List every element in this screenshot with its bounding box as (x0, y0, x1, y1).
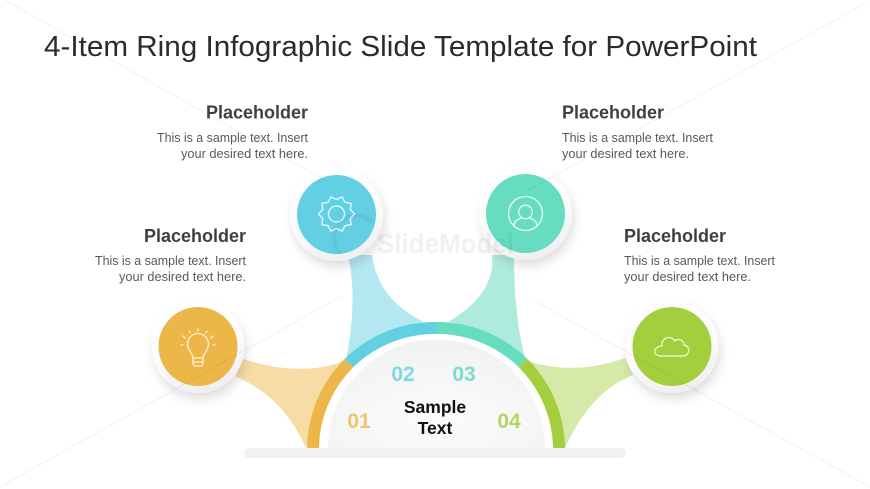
ring segment 02 (349, 328, 436, 363)
number 03: 03 (452, 363, 476, 386)
center label: Sample (404, 397, 466, 417)
center label: Text (418, 418, 453, 438)
number 01: 01 (347, 410, 371, 433)
title: 4-Item Ring Infographic Slide Template for PowerPoint (44, 31, 757, 63)
text block: left: This is a sample text. Insert (95, 254, 247, 268)
node 2: gear (290, 168, 383, 261)
text block: left: your desired text here. (119, 270, 246, 284)
center semicircle (328, 340, 545, 448)
text block: top left: This is a sample text. Insert (157, 131, 309, 145)
text block: top right (562, 102, 714, 161)
funnel: item 4 (527, 358, 633, 448)
text block: top left (157, 102, 309, 161)
icon: cloud (655, 338, 689, 356)
ring segment 01 (313, 363, 349, 448)
icon: user (508, 196, 542, 230)
icon: gear (318, 197, 354, 231)
icon: lightbulb (181, 329, 215, 366)
text block: top right: Placeholder (562, 102, 664, 122)
text block: top right: your desired text here. (562, 147, 689, 161)
funnel: item 1 (236, 358, 344, 448)
base bar (244, 448, 626, 458)
watermark: SlideModel (377, 228, 514, 259)
ring segment 04 (523, 363, 559, 448)
number 04: 04 (497, 410, 521, 433)
text block: right (624, 226, 776, 284)
node 4: cloud (626, 300, 718, 393)
watermark (334, 216, 536, 259)
text block: top left: Placeholder (206, 102, 308, 122)
funnel: item 2 (346, 255, 424, 360)
text block: top right: This is a sample text. Insert (562, 131, 714, 145)
text block: right: Placeholder (624, 226, 726, 246)
text block: left: Placeholder (144, 226, 246, 246)
text block: right: This is a sample text. Insert (624, 254, 776, 268)
text block: top left: your desired text here. (181, 147, 308, 161)
node 1: lightbulb (152, 300, 244, 393)
funnel: item 3 (448, 255, 526, 361)
text block: right: your desired text here. (624, 270, 751, 284)
watermark: .com (514, 245, 536, 256)
number 02: 02 (391, 363, 415, 386)
text block: left (95, 226, 247, 284)
ring segment 03 (436, 328, 523, 363)
node 3: user (479, 167, 572, 260)
